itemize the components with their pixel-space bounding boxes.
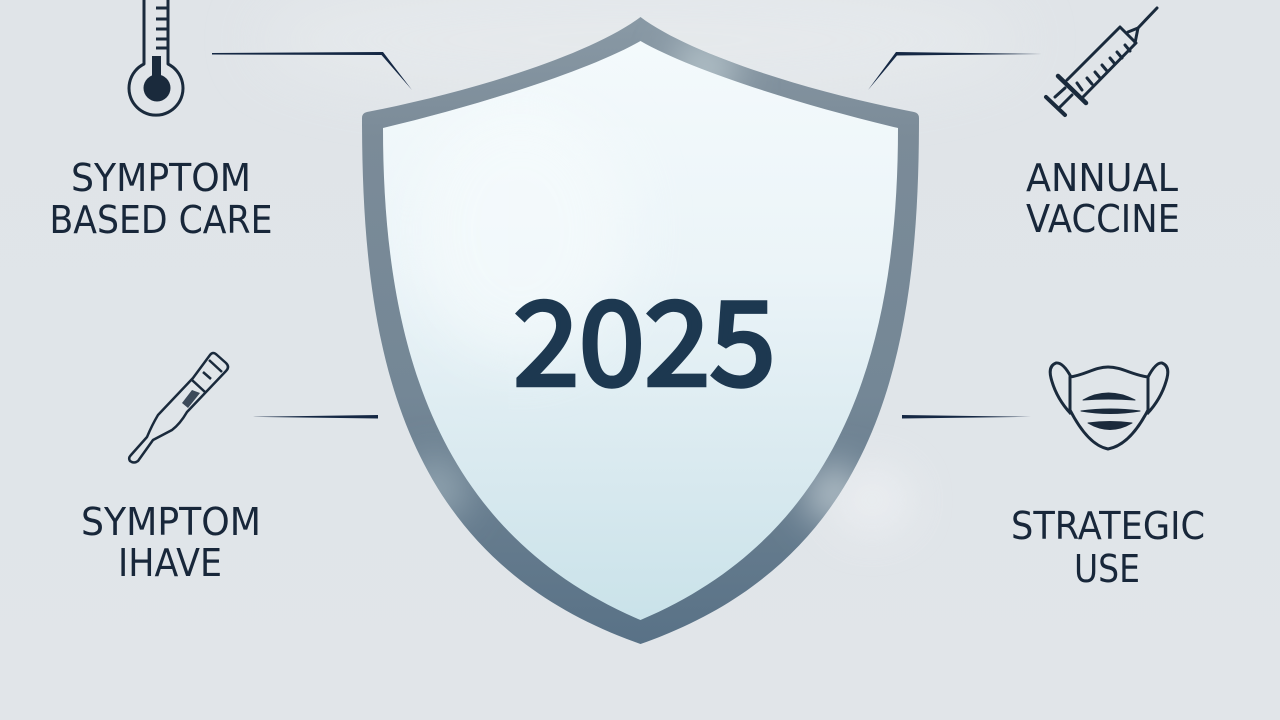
label: symptom based care: BASED CARE [50,198,272,242]
connector: top right [868,52,1042,90]
label: strategic use: USE [1074,547,1140,591]
label: symptom have: SYMPTOM [81,500,261,544]
label: symptom have [81,500,261,585]
shield rim [350,10,930,650]
icon: digital thermometer [129,353,228,462]
shield face [370,35,910,625]
year 2025: 2025 [514,251,776,419]
connector: bottom left [253,415,378,418]
icon: face mask [1050,363,1168,449]
label: strategic use [1011,504,1205,591]
label: annual vaccine [1026,156,1180,241]
icon: syringe [1046,8,1157,115]
connector: bottom right [902,415,1031,418]
label: strategic use: STRATEGIC [1011,504,1205,548]
label: annual vaccine: ANNUAL [1026,156,1178,200]
shield [350,10,930,650]
icon: thermometer [129,0,183,115]
label: symptom based care [50,156,272,242]
label: symptom have: IHAVE [118,541,222,585]
label: symptom based care: SYMPTOM [71,156,251,200]
connector: top left [212,52,412,90]
label: annual vaccine: VACCINE [1026,197,1180,241]
